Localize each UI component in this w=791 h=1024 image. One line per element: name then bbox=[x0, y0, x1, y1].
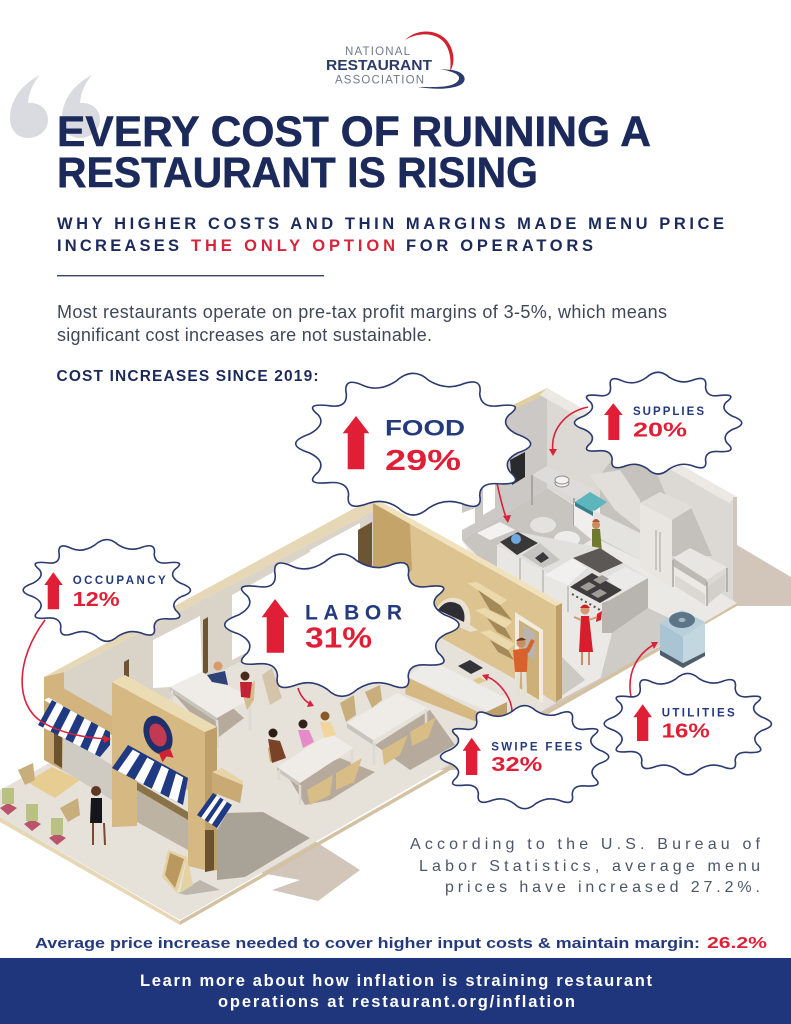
callout: supplies 20%: SUPPLIES bbox=[633, 406, 704, 418]
server in red apron bbox=[574, 604, 602, 665]
air conditioning unit bbox=[660, 610, 705, 668]
subtitle bbox=[57, 215, 724, 255]
bureau of labor statistics note: prices have increased 27.2%. bbox=[445, 879, 760, 896]
callout: food 29%: 29% bbox=[385, 445, 461, 477]
round prep surfaces bbox=[530, 517, 556, 533]
bureau of labor statistics note: Labor Statistics, average menu bbox=[419, 858, 760, 875]
prep table with plates bbox=[532, 466, 594, 525]
callout: supplies 20%: 20% bbox=[633, 420, 687, 442]
callout: swipe fees 32%: SWIPE FEES bbox=[491, 741, 583, 753]
callout: utilities 16% bbox=[604, 673, 771, 775]
divider rule bbox=[57, 275, 324, 276]
main awning bbox=[112, 745, 188, 805]
sign box bbox=[212, 772, 243, 803]
price increase needed line: Average price increase needed to cover higher input costs & maintain margin: bbox=[35, 935, 700, 952]
left awning bbox=[38, 700, 110, 757]
logo: National Restaurant Association: NATIONAL bbox=[345, 46, 411, 58]
title: RESTAURANT IS RISING bbox=[57, 149, 538, 197]
kitchen bbox=[462, 388, 737, 702]
chef in green bbox=[592, 519, 602, 552]
subtitle: FOR OPERATORS bbox=[406, 237, 593, 255]
footer banner bbox=[0, 958, 791, 1024]
bureau of labor statistics note: According to the U.S. Bureau of bbox=[410, 836, 761, 853]
left opening bbox=[62, 735, 112, 800]
building floor shadow bbox=[217, 812, 310, 880]
intro paragraph: significant cost increases are not sustainable. bbox=[57, 325, 432, 345]
door bbox=[515, 612, 543, 703]
intro paragraph bbox=[57, 302, 667, 345]
subtitle: INCREASES bbox=[57, 237, 179, 255]
shelves bbox=[467, 582, 507, 605]
footer banner: operations at restaurant.org/inflation bbox=[218, 993, 575, 1011]
title bbox=[57, 108, 651, 197]
logo: National Restaurant Association bbox=[326, 32, 465, 89]
front counter bbox=[407, 660, 510, 712]
cooking line bbox=[497, 532, 648, 633]
callout: occupancy 12%: 12% bbox=[73, 589, 120, 611]
callout: supplies 20% bbox=[574, 372, 742, 474]
table 3 bbox=[347, 693, 427, 740]
steel side table bbox=[673, 548, 727, 606]
table 1 bbox=[170, 672, 252, 718]
callout: swipe fees 32% bbox=[440, 706, 609, 809]
dining tables and chairs bbox=[170, 668, 455, 805]
callout: occupancy 12%: OCCUPANCY bbox=[73, 575, 166, 587]
back wall of dining room bbox=[44, 497, 375, 755]
callout: occupancy 12% bbox=[23, 540, 190, 641]
callout: food 29% bbox=[296, 373, 531, 515]
callout: utilities 16%: UTILITIES bbox=[662, 708, 735, 720]
callout: utilities 16%: 16% bbox=[662, 721, 710, 743]
callout: food 29%: FOOD bbox=[385, 416, 465, 441]
cost arrows to scene bbox=[22, 407, 655, 739]
table 2 bbox=[277, 733, 353, 783]
diners bbox=[207, 662, 336, 763]
logo: National Restaurant Association: RESTAURANT bbox=[326, 57, 432, 74]
decorative quote mark bbox=[10, 75, 100, 138]
interior tan wall bbox=[373, 500, 562, 724]
main block bbox=[112, 682, 205, 870]
storefront bbox=[38, 675, 243, 872]
hostess in black bbox=[90, 786, 105, 845]
subtitle: WHY HIGHER COSTS AND THIN MARGINS MADE MENU PRICE bbox=[57, 215, 724, 233]
floor slab bbox=[0, 590, 737, 925]
round sign bbox=[138, 711, 181, 765]
back counter bbox=[593, 510, 640, 560]
title: EVERY COST OF RUNNING A bbox=[57, 108, 651, 156]
logo: National Restaurant Association: ASSOCIATION bbox=[335, 74, 424, 86]
patio table, chairs and planters bbox=[0, 763, 80, 845]
callout: swipe fees 32%: 32% bbox=[491, 754, 543, 776]
illustration: isometric restaurant bbox=[0, 388, 791, 925]
arrowheads bbox=[103, 449, 658, 743]
callout: labor 31%: 31% bbox=[305, 622, 372, 654]
subtitle: THE ONLY OPTION bbox=[191, 237, 395, 255]
price increase needed line: 26.2% bbox=[707, 935, 767, 952]
bureau of labor statistics note bbox=[410, 836, 761, 896]
a-frame sign bbox=[162, 850, 220, 895]
callout: labor 31%: LABOR bbox=[305, 601, 402, 624]
chalkboard bbox=[510, 452, 525, 485]
teal dish machine bbox=[574, 492, 607, 540]
side awning bbox=[197, 793, 232, 828]
intro paragraph: Most restaurants operate on pre-tax profit margins of 3-5%, which means bbox=[57, 302, 667, 322]
ground shadows bbox=[255, 545, 791, 901]
refrigerator bbox=[640, 492, 712, 587]
host in orange shirt bbox=[513, 638, 533, 700]
callout: labor 31% bbox=[225, 554, 459, 696]
footer banner: Learn more about how inflation is straining restaurant bbox=[140, 972, 652, 990]
section label: COST INCREASES SINCE 2019: bbox=[56, 368, 318, 385]
pizza oven arch bbox=[434, 598, 478, 632]
